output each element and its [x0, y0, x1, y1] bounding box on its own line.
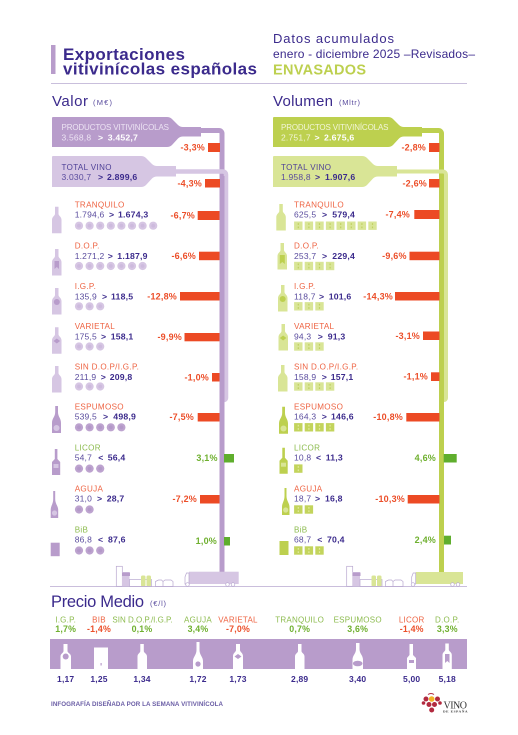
- row: bib: 87,6: [108, 535, 126, 545]
- price: bib: 1,25: [90, 674, 108, 684]
- unit: volumen: (Mltr): [339, 98, 360, 107]
- subtitle: Datos acumulados: [273, 31, 394, 46]
- price: aguja: 1,72: [189, 674, 207, 684]
- row: varietal: [278, 322, 440, 351]
- price: espumoso: 3,40: [349, 674, 366, 684]
- row: d.o.p.: 253,7: [294, 251, 316, 261]
- price: i.g.p.: 1,17: [57, 674, 74, 684]
- price: d.o.p.: 5,18: [439, 674, 456, 684]
- pipe: productos vitivinícolas: [200, 130, 222, 572]
- price: sin d.o.p./i.g.p.: [112, 616, 173, 684]
- icon: sin d.o.p. bottle: [278, 365, 288, 392]
- row: espumoso: [52, 402, 220, 433]
- row: licor: LICOR: [75, 443, 101, 452]
- change: productos -3,3%: -3,3%: [180, 142, 205, 152]
- row: bib: 68,7: [294, 535, 311, 545]
- row: licor: <: [98, 453, 104, 463]
- row: varietal: VARIETAL: [294, 322, 335, 331]
- price: licor: -1,4%: [400, 624, 424, 634]
- bottle: productos vitivinícolas: PRODUCTOS VITIVINÍCOLAS: [62, 123, 169, 132]
- row: bib: 70,4: [327, 535, 345, 545]
- bottle: total vino: 1.907,6: [325, 172, 355, 182]
- row: licor: LICOR: [294, 443, 320, 452]
- row: bib: <: [98, 535, 103, 545]
- row: espumoso: 498,9: [113, 412, 136, 422]
- price: espumoso: ESPUMOSO: [334, 616, 382, 625]
- icon: d.o.p. bottle: [278, 243, 287, 270]
- row: bib: [280, 525, 451, 555]
- change: total vino -4,3%: -4,3%: [177, 178, 202, 188]
- price: varietal: -7,0%: [226, 624, 250, 634]
- row: varietal: -3,1%: [395, 331, 420, 341]
- row: d.o.p.: [278, 242, 440, 270]
- row: tranquilo: 1.794,6: [75, 210, 105, 220]
- price: i.g.p.: 1,7%: [55, 624, 76, 634]
- row: i.g.p.: >: [102, 291, 107, 301]
- row: d.o.p.: 1.187,9: [117, 251, 148, 261]
- row: aguja: [51, 484, 220, 518]
- price: bib: -1,4%: [87, 624, 111, 634]
- row: sin d.o.p/i.g.p.: 157,1: [331, 372, 353, 382]
- row: tranquilo: -7,4%: [385, 210, 410, 220]
- row: d.o.p.: 229,4: [332, 251, 355, 261]
- icon: aguja bottle: [51, 491, 58, 518]
- bottle: productos vitivinícolas: PRODUCTOS VITIVINÍCOLAS: [281, 123, 388, 132]
- price: tranquilo: [275, 616, 324, 684]
- price: tranquilo: TRANQUILO: [275, 616, 324, 625]
- logo: vino de españa: DE ESPAÑA: [443, 708, 468, 714]
- price: licor: [399, 616, 425, 684]
- panel: volumen: [273, 93, 457, 572]
- row: sin d.o.p/i.g.p.: SIN D.O.P/I.G.P.: [294, 362, 358, 372]
- bottle: total vino: 3.030,7: [62, 172, 91, 182]
- row: bib: [51, 525, 230, 556]
- row: aguja: AGUJA: [294, 484, 323, 493]
- title: vitivinícolas españolas: [63, 60, 257, 78]
- pipe: productos vitivinícolas: [420, 130, 442, 572]
- price: i.g.p.: [55, 616, 76, 684]
- row: licor: 56,4: [108, 453, 125, 463]
- row: sin d.o.p/i.g.p.: 211,9: [75, 372, 96, 382]
- row: i.g.p.: I.G.P.: [75, 282, 96, 291]
- row: varietal: -9,9%: [157, 332, 182, 342]
- row: sin d.o.p/i.g.p.: >: [322, 372, 327, 382]
- row: d.o.p.: D.O.P.: [294, 242, 319, 251]
- icon: varietal bottle: [278, 324, 288, 350]
- row: varietal: 94,3: [294, 332, 311, 342]
- price: varietal: 1,73: [229, 674, 247, 684]
- price: espumoso: [334, 616, 382, 684]
- row: sin d.o.p/i.g.p.: -1,1%: [403, 372, 428, 382]
- icon: licor bottle: [52, 449, 60, 475]
- bottle: productos vitivinícolas: >: [98, 132, 103, 142]
- title: Exportaciones: [63, 45, 185, 64]
- row: varietal: 158,1: [111, 332, 133, 342]
- row: espumoso: -10,8%: [373, 412, 403, 422]
- row: tranquilo: TRANQUILO: [294, 200, 344, 210]
- bottle: productos vitivinícolas: 2.751,7: [281, 132, 311, 142]
- price: licor: 5,00: [403, 674, 420, 684]
- title accent bar: [51, 45, 56, 74]
- row: sin d.o.p/i.g.p.: -1,0%: [184, 372, 209, 382]
- row: sin d.o.p/i.g.p.: >: [101, 372, 106, 382]
- price: aguja: AGUJA: [184, 616, 212, 625]
- price: varietal: VARIETAL: [218, 616, 258, 625]
- price: tranquilo: 0,7%: [289, 624, 310, 634]
- row: i.g.p.: 135,9: [75, 291, 97, 301]
- price: sin d.o.p./i.g.p.: SIN D.O.P./I.G.P.: [112, 616, 173, 625]
- row: d.o.p.: >: [322, 251, 327, 261]
- row: varietal: [52, 322, 220, 354]
- icon: varietal bottle: [52, 327, 62, 354]
- change: productos -2,8%: [401, 142, 440, 152]
- row: aguja: [282, 484, 440, 515]
- price: sin d.o.p./i.g.p.: 0,1%: [132, 624, 152, 634]
- row: tranquilo: >: [109, 210, 114, 220]
- row: licor: [52, 443, 234, 475]
- price: bib: [87, 616, 111, 684]
- row: d.o.p.: -6,6%: [171, 251, 196, 261]
- price: aguja: [184, 616, 212, 684]
- row: aguja: 18,7: [294, 494, 311, 504]
- category: envasados: ENVASADOS: [273, 62, 366, 78]
- illustration: factory and truck, valor: [116, 566, 239, 586]
- row: espumoso: >: [103, 412, 108, 422]
- logo: vino de españa: [422, 694, 468, 714]
- panel: valor: [51, 93, 234, 572]
- row: i.g.p.: 118,5: [111, 291, 133, 301]
- row: bib: 86,8: [75, 535, 92, 545]
- row: licor: 4,6%: [415, 453, 436, 463]
- illustration: factory and truck, volumen: [347, 566, 463, 586]
- row: licor: 11,3: [326, 453, 343, 463]
- price: varietal: [218, 616, 258, 684]
- row: tranquilo: [52, 200, 220, 233]
- row: tranquilo: [276, 200, 440, 230]
- icon: espumoso bottle: [279, 407, 288, 434]
- row: aguja: -10,3%: [375, 494, 405, 504]
- icon: tranquilo bottle: [276, 204, 286, 230]
- row: aguja: AGUJA: [75, 484, 103, 493]
- price: bib: BIB: [92, 616, 106, 625]
- row: espumoso: ESPUMOSO: [75, 402, 124, 411]
- row: varietal: >: [101, 332, 106, 342]
- price: sin d.o.p./i.g.p.: 1,34: [133, 674, 151, 684]
- bottle: total vino: TOTAL VINO: [62, 163, 112, 172]
- price: tranquilo: 2,89: [291, 674, 308, 684]
- change: total vino -2,6%: -2,6%: [402, 178, 427, 188]
- row: i.g.p.: 118,7: [294, 291, 316, 301]
- row: i.g.p.: I.G.P.: [294, 282, 315, 291]
- change: productos -3,3%: [180, 142, 220, 152]
- price: d.o.p.: 3,3%: [437, 624, 458, 634]
- row: varietal: 175,5: [75, 332, 97, 342]
- row: espumoso: -7,5%: [169, 412, 194, 422]
- row: bib: <: [317, 535, 323, 545]
- row: bib: 1,0%: [196, 536, 217, 546]
- row: tranquilo: 1.674,3: [118, 210, 148, 220]
- row: espumoso: ESPUMOSO: [294, 402, 343, 411]
- row: bib: BiB: [75, 525, 88, 534]
- row: d.o.p.: >: [108, 251, 113, 261]
- row: aguja: >: [315, 494, 320, 504]
- change: total vino -4,3%: [177, 178, 220, 188]
- row: d.o.p.: [52, 242, 220, 276]
- price: aguja: 3,4%: [188, 624, 208, 634]
- row: espumoso: 164,3: [294, 412, 316, 422]
- logo: vino de españa: VINO: [444, 700, 467, 712]
- row: espumoso: 539,5: [75, 412, 97, 422]
- row: espumoso: >: [322, 412, 327, 422]
- change: productos -2,8%: -2,8%: [401, 142, 426, 152]
- bottle: productos vitivinícolas: 2.675,6: [324, 132, 354, 142]
- bottle: total vino: >: [98, 172, 103, 182]
- row: aguja: 28,7: [107, 494, 124, 504]
- row: tranquilo: -6,7%: [170, 210, 195, 220]
- pipe: total vino: [175, 172, 226, 400]
- icon: tranquilo bottle: [52, 207, 62, 233]
- row: espumoso: [279, 402, 440, 434]
- row: i.g.p.: -14,3%: [363, 291, 393, 301]
- bottle: productos vitivinícolas: >: [314, 132, 320, 142]
- price: espumoso: 3,6%: [347, 624, 368, 634]
- unit: precio medio: (€/l): [150, 599, 166, 608]
- icon: bib box: [51, 543, 60, 556]
- row: licor: 3,1%: [196, 453, 218, 463]
- row: i.g.p.: 101,6: [329, 291, 351, 301]
- row: aguja: 31,0: [75, 494, 92, 504]
- row: sin d.o.p/i.g.p.: [52, 362, 220, 392]
- row: varietal: >: [318, 332, 323, 342]
- bottle: productos vitivinícolas: 3.568,8: [62, 132, 91, 142]
- panel: price band: [50, 616, 467, 684]
- heading: precio medio: Precio Medio: [51, 593, 144, 611]
- price: i.g.p.: I.G.P.: [55, 616, 76, 625]
- icon: espumoso bottle: [52, 406, 61, 433]
- row: i.g.p.: -12,8%: [147, 291, 177, 301]
- row: sin d.o.p/i.g.p.: SIN D.O.P/I.G.P.: [75, 362, 139, 372]
- row: tranquilo: TRANQUILO: [75, 200, 125, 210]
- row: espumoso: 146,6: [331, 412, 354, 422]
- footer credit: INFOGRAFÍA DISEÑADA POR LA SEMANA VITIVINÍCOLA: [51, 700, 224, 708]
- price: d.o.p.: D.O.P.: [435, 616, 460, 625]
- row: licor: 54,7: [75, 453, 92, 463]
- subtitle: enero - diciembre 2025 –Revisados–: [273, 47, 475, 61]
- heading: valor: Valor: [52, 93, 88, 110]
- row: tranquilo: 625,5: [294, 210, 316, 220]
- row: sin d.o.p/i.g.p.: 209,8: [110, 372, 132, 382]
- bottle: total vino: TOTAL VINO: [281, 163, 331, 172]
- change: total vino -2,6%: [402, 178, 440, 188]
- row: aguja: >: [97, 494, 102, 504]
- icon: bib box: [280, 541, 288, 555]
- row: d.o.p.: 1.271,2: [75, 251, 105, 261]
- row: aguja: -7,2%: [172, 494, 197, 504]
- bottle: total vino: [52, 156, 176, 187]
- bottle: productos vitivinícolas: [273, 117, 422, 147]
- icon: sin d.o.p. bottle: [52, 366, 62, 392]
- row: i.g.p.: >: [319, 291, 324, 301]
- price: licor: LICOR: [399, 616, 425, 625]
- row: tranquilo: 579,4: [332, 210, 355, 220]
- row: bib: 2,4%: [415, 535, 436, 545]
- row: d.o.p.: D.O.P.: [75, 242, 100, 251]
- row: bib: BiB: [294, 525, 308, 534]
- row: licor: <: [316, 453, 321, 463]
- pipe: total vino: [396, 172, 446, 400]
- row: sin d.o.p/i.g.p.: 158,9: [294, 372, 316, 382]
- row: d.o.p.: -9,6%: [382, 251, 407, 261]
- icon: i.g.p. bottle: [52, 288, 62, 314]
- row: tranquilo: >: [322, 210, 327, 220]
- price: d.o.p.: [435, 616, 460, 684]
- bottle: total vino: [273, 156, 397, 187]
- heading: volumen: Volumen: [273, 93, 333, 110]
- icon: aguja bottle: [282, 488, 290, 515]
- row: sin d.o.p/i.g.p.: [278, 362, 440, 392]
- row: licor: [280, 443, 457, 474]
- row: i.g.p.: [52, 282, 220, 314]
- bottle: total vino: 1.958,8: [281, 172, 311, 182]
- icon: licor bottle: [280, 448, 288, 474]
- row: aguja: 16,8: [325, 494, 343, 504]
- icon: d.o.p. bottle: [52, 249, 62, 276]
- bottle: productos vitivinícolas: 3.452,7: [108, 132, 138, 142]
- row: licor: 10,8: [294, 453, 311, 463]
- row: varietal: VARIETAL: [75, 322, 115, 331]
- unit: valor: (M€): [93, 98, 112, 107]
- bottle: total vino: >: [315, 172, 320, 182]
- bottle: productos vitivinícolas: [52, 117, 201, 147]
- row: varietal: 91,3: [328, 332, 345, 342]
- icon: i.g.p. bottle: [278, 285, 288, 312]
- row: i.g.p.: [278, 282, 440, 312]
- bottle: total vino: 2.899,6: [107, 172, 137, 182]
